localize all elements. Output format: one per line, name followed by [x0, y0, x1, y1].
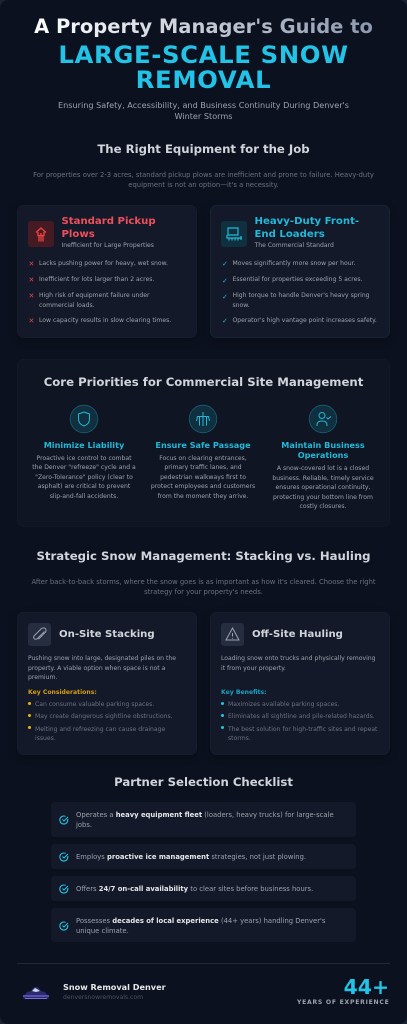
list: advantages: Operator's high vantage point increases safety.	[232, 316, 377, 324]
icon: paperclip	[28, 623, 51, 646]
checklist item 3	[51, 876, 356, 901]
title line 2: LARGE-SCALE SNOW	[58, 40, 349, 69]
priority text: protect employees and customers	[151, 483, 255, 490]
priority text: protecting your bottom line from	[273, 494, 373, 500]
intro text: strategy: After back-to-back storms, where the snow goes is as important as how it's cleared. Choose the right	[31, 578, 376, 586]
brand name: Snow Removal Denver	[63, 982, 166, 992]
heading: equipment: The Right Equipment for the Job	[97, 142, 310, 156]
priority text: asphalt) are critical to prevent	[38, 483, 130, 490]
card description: premium.	[28, 674, 57, 681]
priority text: business. Reliable, timely service	[272, 474, 374, 482]
list: drawbacks: commercial loads.	[39, 302, 95, 308]
list: benefits: storms.	[228, 735, 251, 742]
card title: End Loaders	[254, 228, 325, 240]
stat: 44+: 44+	[344, 975, 389, 999]
panel: on-site stacking	[17, 612, 197, 755]
list: advantages: ✓	[222, 317, 228, 325]
key considerations label: Key Considerations:	[28, 688, 97, 696]
list: drawbacks: Low capacity results in slow clearing times.	[39, 316, 171, 324]
list: advantages: High torque to handle Denver's heavy spring	[232, 292, 370, 299]
item text	[76, 917, 326, 934]
icon: user check	[308, 404, 338, 434]
priority heading: Maintain Business	[281, 440, 365, 450]
list: drawbacks: ✕	[28, 276, 34, 284]
priority text	[272, 465, 374, 510]
card description: Loading snow onto trucks and physically removing	[221, 655, 376, 662]
icon: check	[59, 922, 68, 931]
priority: business operations	[272, 404, 374, 510]
priority heading: Operations	[298, 450, 348, 460]
header	[34, 15, 373, 120]
list: considerations: Melting and refreezing can cause drainage	[35, 726, 165, 732]
icon: warning triangle	[221, 623, 244, 646]
priority: minimize liability	[32, 404, 136, 500]
card description	[28, 655, 176, 681]
icon: check	[59, 816, 68, 825]
list: drawbacks: ✕	[28, 260, 34, 268]
panel: core priorities	[17, 359, 390, 527]
intro text: equipment: equipment is not an option—it's a necessity.	[128, 180, 279, 188]
icon: walkway	[188, 404, 218, 434]
card description: it from your property.	[221, 664, 286, 672]
list: drawbacks: Lacks pushing power for heavy, wet snow.	[39, 260, 168, 266]
subtitle: Ensuring Safety, Accessibility, and Business Continuity During Denver's	[58, 100, 349, 110]
icon: plow	[28, 220, 54, 246]
list: benefits: Maximizes available parking spaces.	[228, 701, 339, 708]
list: benefits	[221, 701, 378, 742]
subtitle: Winter Storms	[174, 110, 233, 120]
priority: safe passage	[151, 404, 255, 500]
icon: check	[59, 884, 68, 894]
list: advantages: snow.	[232, 302, 250, 308]
website: denversnowremovals.com	[63, 994, 143, 1000]
subtitle	[58, 100, 349, 120]
priority heading	[281, 440, 365, 460]
list: advantages: ✓	[222, 276, 228, 284]
card description: Pushing snow into large, designated piles on the	[28, 655, 176, 662]
priority text: from the moment they arrive.	[158, 492, 248, 500]
list: advantages: ✓	[222, 292, 228, 300]
item text: Operates a heavy equipment fleet (loaders, heavy trucks) for large-scale	[76, 811, 334, 819]
checklist item 1	[51, 802, 356, 837]
list: drawbacks: Inefficient for lots larger than 2 acres.	[39, 276, 154, 283]
list: benefits: The best solution for high-traffic sites and repeat	[228, 726, 377, 732]
logo	[23, 987, 49, 999]
heading: core priorities: Core Priorities for Commercial Site Management	[44, 375, 363, 389]
item text	[76, 811, 334, 828]
list: advantages: Moves significantly more snow per hour.	[232, 260, 355, 266]
title line 2	[58, 40, 349, 94]
intro text: strategy: strategy for your property's needs.	[144, 588, 263, 596]
card title: Plows	[62, 228, 95, 240]
panel: heavy-duty loaders	[210, 205, 390, 338]
icon: shield	[70, 404, 98, 434]
priority text: ensures operational continuity,	[276, 484, 370, 491]
list: drawbacks: ✕	[28, 292, 34, 300]
panel: standard pickup plows	[17, 205, 197, 338]
list: considerations: May create dangerous sightline obstructions.	[35, 713, 173, 720]
list: advantages: Essential for properties exceeding 5 acres.	[232, 276, 362, 283]
priority text: Focus on clearing entrances,	[159, 454, 247, 462]
card title: Heavy-Duty Front-	[254, 216, 359, 227]
card title	[62, 216, 156, 240]
list: considerations: Can consume valuable parking spaces.	[35, 701, 154, 708]
priority text: "Zero-Tolerance" policy (clear to	[35, 474, 133, 480]
priority text	[32, 454, 136, 500]
priority text: A snow-covered lot is a closed	[277, 465, 369, 472]
intro text: strategy	[31, 578, 376, 596]
priority heading: Ensure Safe Passage	[155, 440, 251, 450]
item text: Employs proactive ice management strategies, not just plowing.	[76, 853, 306, 861]
priority text: Proactive ice control to combat	[36, 454, 131, 462]
priority text: primary traffic lanes, and	[164, 464, 242, 471]
list: considerations: issues.	[35, 735, 56, 742]
priority text: slip-and-fall accidents.	[50, 492, 118, 500]
item text: Possesses decades of local experience (44+ years) handling Denver's	[76, 917, 325, 925]
card title: Off-Site Hauling	[252, 628, 343, 640]
footer	[23, 975, 390, 1006]
intro text: equipment: For properties over 2-3 acres, standard pickup plows are inefficient and prone to failure. Heavy-duty	[33, 171, 374, 179]
card title	[254, 216, 359, 240]
card title: Standard Pickup	[62, 216, 156, 227]
list: advantages: ✓	[222, 260, 228, 268]
heading: strategic snow management: Strategic Snow Management: Stacking vs. Hauling	[36, 549, 371, 563]
priority text: the Denver "refreeze" cycle and a	[32, 464, 136, 471]
list: considerations	[28, 701, 173, 742]
intro text: equipment	[33, 171, 374, 188]
list: drawbacks: High risk of equipment failure under	[39, 292, 150, 299]
heading: checklist: Partner Selection Checklist	[114, 775, 293, 789]
priority text: pedestrian walkways first to	[160, 474, 246, 480]
icon: check	[59, 852, 68, 862]
icon: loader	[221, 220, 247, 246]
title line 2: REMOVAL	[136, 65, 271, 94]
item text: unique climate.	[76, 926, 129, 934]
checklist item 2	[51, 844, 356, 869]
checklist item 4	[51, 908, 356, 942]
stat label: YEARS OF EXPERIENCE	[297, 999, 390, 1006]
card subtitle: Inefficient for Large Properties	[62, 242, 154, 248]
item text: Offers 24/7 on-call availability to clear sites before business hours.	[76, 885, 313, 893]
item text: jobs.	[76, 820, 92, 828]
priority text	[151, 454, 255, 500]
title line 1: A Property Manager's Guide to	[34, 15, 373, 38]
panel: off-site hauling	[210, 612, 390, 755]
key benefits label: Key Benefits:	[221, 688, 267, 696]
priority heading: Minimize Liability	[44, 440, 124, 450]
list: drawbacks: ✕	[28, 316, 34, 324]
card title: On-Site Stacking	[59, 628, 155, 640]
card description: property. A viable option when space is not a	[28, 664, 165, 672]
card description	[221, 655, 376, 672]
priority text: costly closures.	[300, 503, 346, 510]
list: benefits: Eliminates all sightline and pile-related hazards.	[228, 713, 375, 720]
list: drawbacks	[28, 260, 171, 324]
card subtitle: The Commercial Standard	[254, 242, 334, 248]
list: advantages	[222, 260, 377, 325]
